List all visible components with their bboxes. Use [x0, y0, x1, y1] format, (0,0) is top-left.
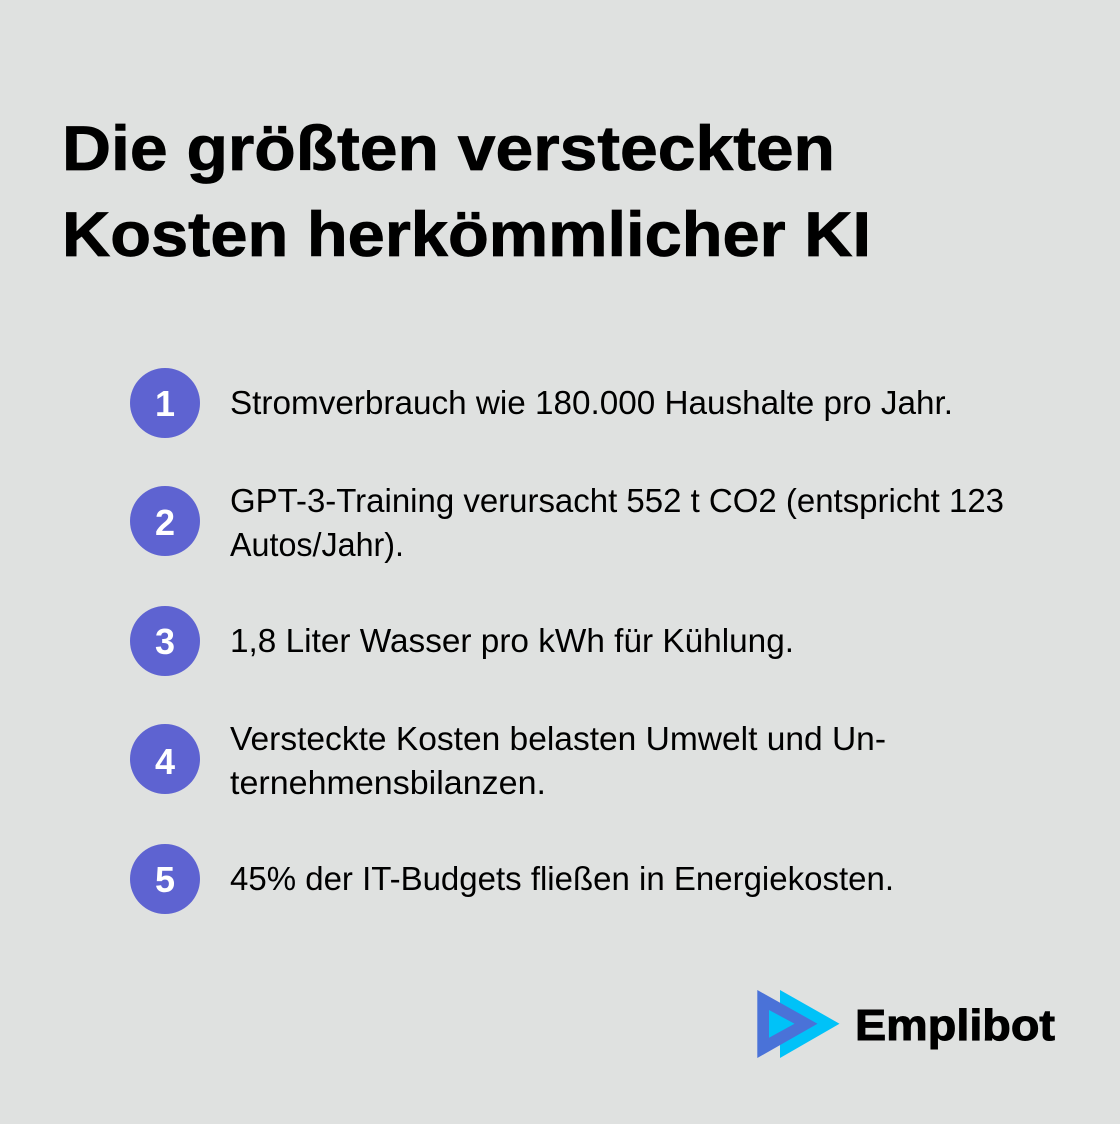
list item 2	[130, 483, 1004, 564]
text: item 4: Versteckte Kosten belasten Umwelt und Un-	[230, 721, 886, 758]
number badge 5: 5	[155, 859, 175, 900]
text: item 2: GPT-3-Training verursacht 552 t CO2 (entspricht 123	[230, 483, 1004, 520]
title: Kosten herkömmlicher KI	[62, 200, 871, 270]
logo wordmark: Emplibot	[855, 1001, 1055, 1050]
list item 3	[130, 606, 794, 676]
text: item 4: ternehmensbilanzen.	[230, 765, 546, 802]
number badge 1: 1	[155, 383, 175, 424]
text: item 1: Stromverbrauch wie 180.000 Haushalte pro Jahr.	[230, 385, 953, 422]
list item 1	[130, 368, 953, 438]
number badge 3	[130, 606, 200, 676]
logo: Emplibot	[757, 990, 1055, 1058]
list item 5	[130, 844, 894, 914]
text: item 3: 1,8 Liter Wasser pro kWh für Kühlung.	[230, 623, 794, 660]
number badge 4	[130, 724, 200, 794]
list item 4	[130, 721, 886, 802]
number badge 2: 2	[155, 502, 175, 543]
icon: play triangles	[757, 990, 840, 1058]
title	[62, 114, 871, 270]
number badge 1	[130, 368, 200, 438]
text: item 5: 45% der IT-Budgets fließen in Energiekosten.	[230, 861, 894, 898]
number badge 3: 3	[155, 621, 175, 662]
number badge 4: 4	[155, 741, 175, 782]
text: item 4	[230, 721, 886, 802]
text: item 2	[230, 483, 1004, 564]
text: item 2: Autos/Jahr).	[230, 527, 404, 564]
number badge 2	[130, 486, 200, 556]
number badge 5	[130, 844, 200, 914]
title: Die größten versteckten	[62, 114, 835, 184]
